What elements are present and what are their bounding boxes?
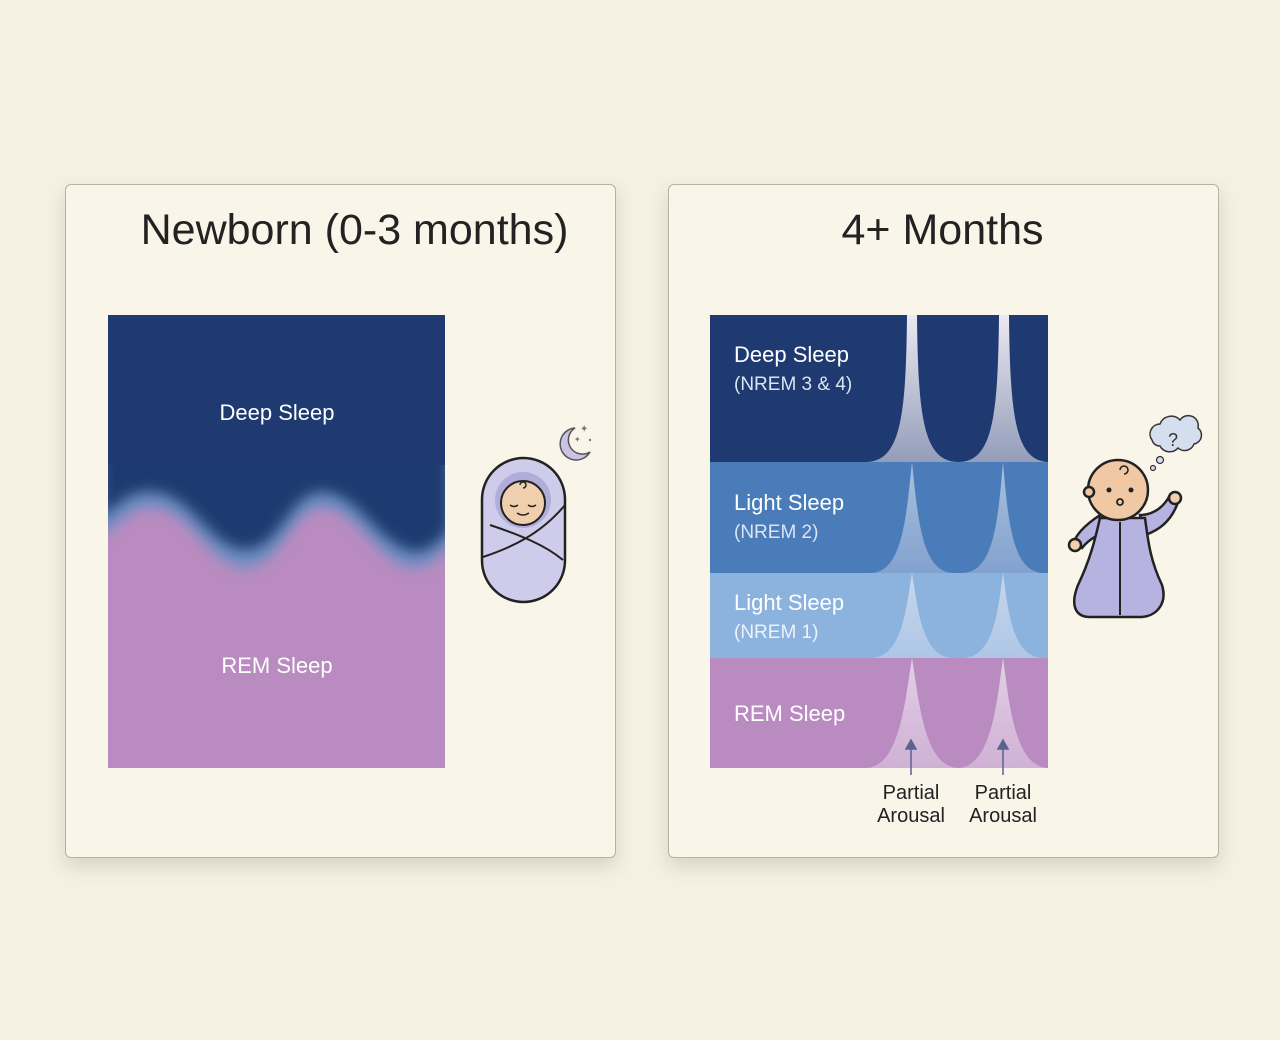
labels: stages: (NREM 1) [734, 622, 818, 643]
labels: stages: Light Sleep [734, 490, 844, 515]
labels: stages [734, 342, 852, 726]
icon: moon and stars: ✦ [574, 435, 581, 444]
labels: partial arousal: Partial [975, 782, 1031, 804]
arrows: partial arousal [906, 740, 1008, 775]
icon: moon and stars: ✦ [580, 424, 588, 435]
panel: newborn [65, 184, 616, 858]
chart: newborn sleep [100, 300, 450, 768]
title: 4+ months: 4+ Months [842, 206, 1043, 254]
spikes: partial arousals [865, 315, 1050, 768]
labels: partial arousal: Partial [883, 782, 939, 804]
icon: swaddled newborn [482, 458, 565, 602]
chart: 4+ months sleep stages [710, 315, 1050, 768]
labels: stages: REM Sleep [734, 701, 845, 726]
labels: partial arousal [877, 782, 1037, 827]
icon: thought cloud: ? [1168, 430, 1178, 450]
label: deep sleep: Deep Sleep [220, 400, 334, 425]
label: rem sleep: REM Sleep [221, 653, 333, 678]
labels: stages: (NREM 2) [734, 522, 818, 543]
labels: partial arousal: Arousal [877, 805, 945, 827]
panel: 4+ months [668, 184, 1219, 858]
labels: stages: Light Sleep [734, 590, 844, 615]
labels: stages: Deep Sleep [734, 342, 849, 367]
icon: thought cloud [1150, 416, 1202, 470]
title: newborn: Newborn (0-3 months) [141, 206, 568, 254]
labels: partial arousal: Arousal [969, 805, 1037, 827]
labels: stages: (NREM 3 & 4) [734, 374, 852, 395]
icon: awake baby [1069, 460, 1181, 617]
icon: moon and stars [560, 424, 591, 460]
